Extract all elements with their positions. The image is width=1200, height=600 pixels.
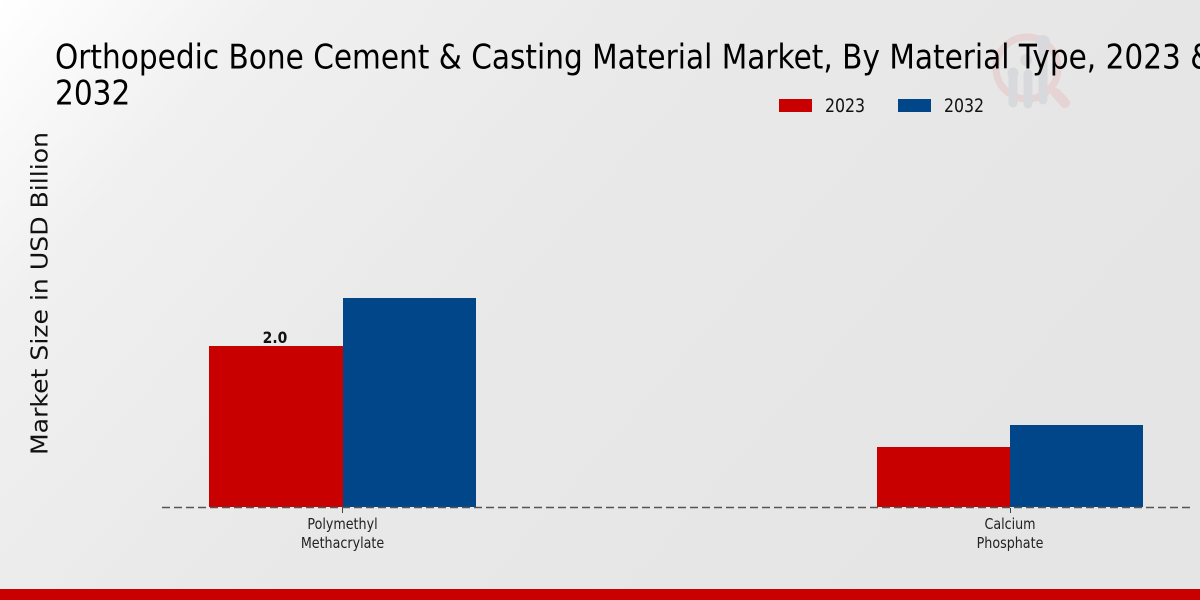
bar chart [162, 298, 1190, 552]
bar: Polymethyl Methacrylate 2032 [343, 298, 476, 507]
title: Orthopedic Bone Cement & Casting Material Market, By Material Type, 2023 & [55, 36, 1200, 77]
category label: Polymethyl Methacrylate [301, 516, 384, 552]
watermark logo [996, 35, 1065, 104]
legend: 2032 [944, 96, 984, 117]
y axis label: Market Size in USD Billion [26, 132, 54, 455]
bar: Calcium Phosphate 2023 [877, 447, 1010, 507]
category label: Calcium Phosphate [977, 516, 1043, 552]
title [55, 36, 1200, 113]
bar: Polymethyl Methacrylate 2023 [209, 346, 343, 507]
legend: 2023 [825, 96, 865, 117]
baseline [162, 506, 1190, 508]
footer bar [0, 589, 1200, 600]
legend [779, 96, 984, 117]
title: 2032 [55, 72, 130, 113]
data label: 2.0 [263, 328, 287, 347]
category label: Calcium Phosphate: Calcium [984, 516, 1036, 533]
category label: Polymethyl Methacrylate: Polymethyl [307, 516, 378, 533]
category label: Polymethyl Methacrylate: Methacrylate [301, 535, 384, 552]
category label: Calcium Phosphate: Phosphate [977, 535, 1043, 552]
bar: Calcium Phosphate 2032 [1010, 425, 1143, 507]
